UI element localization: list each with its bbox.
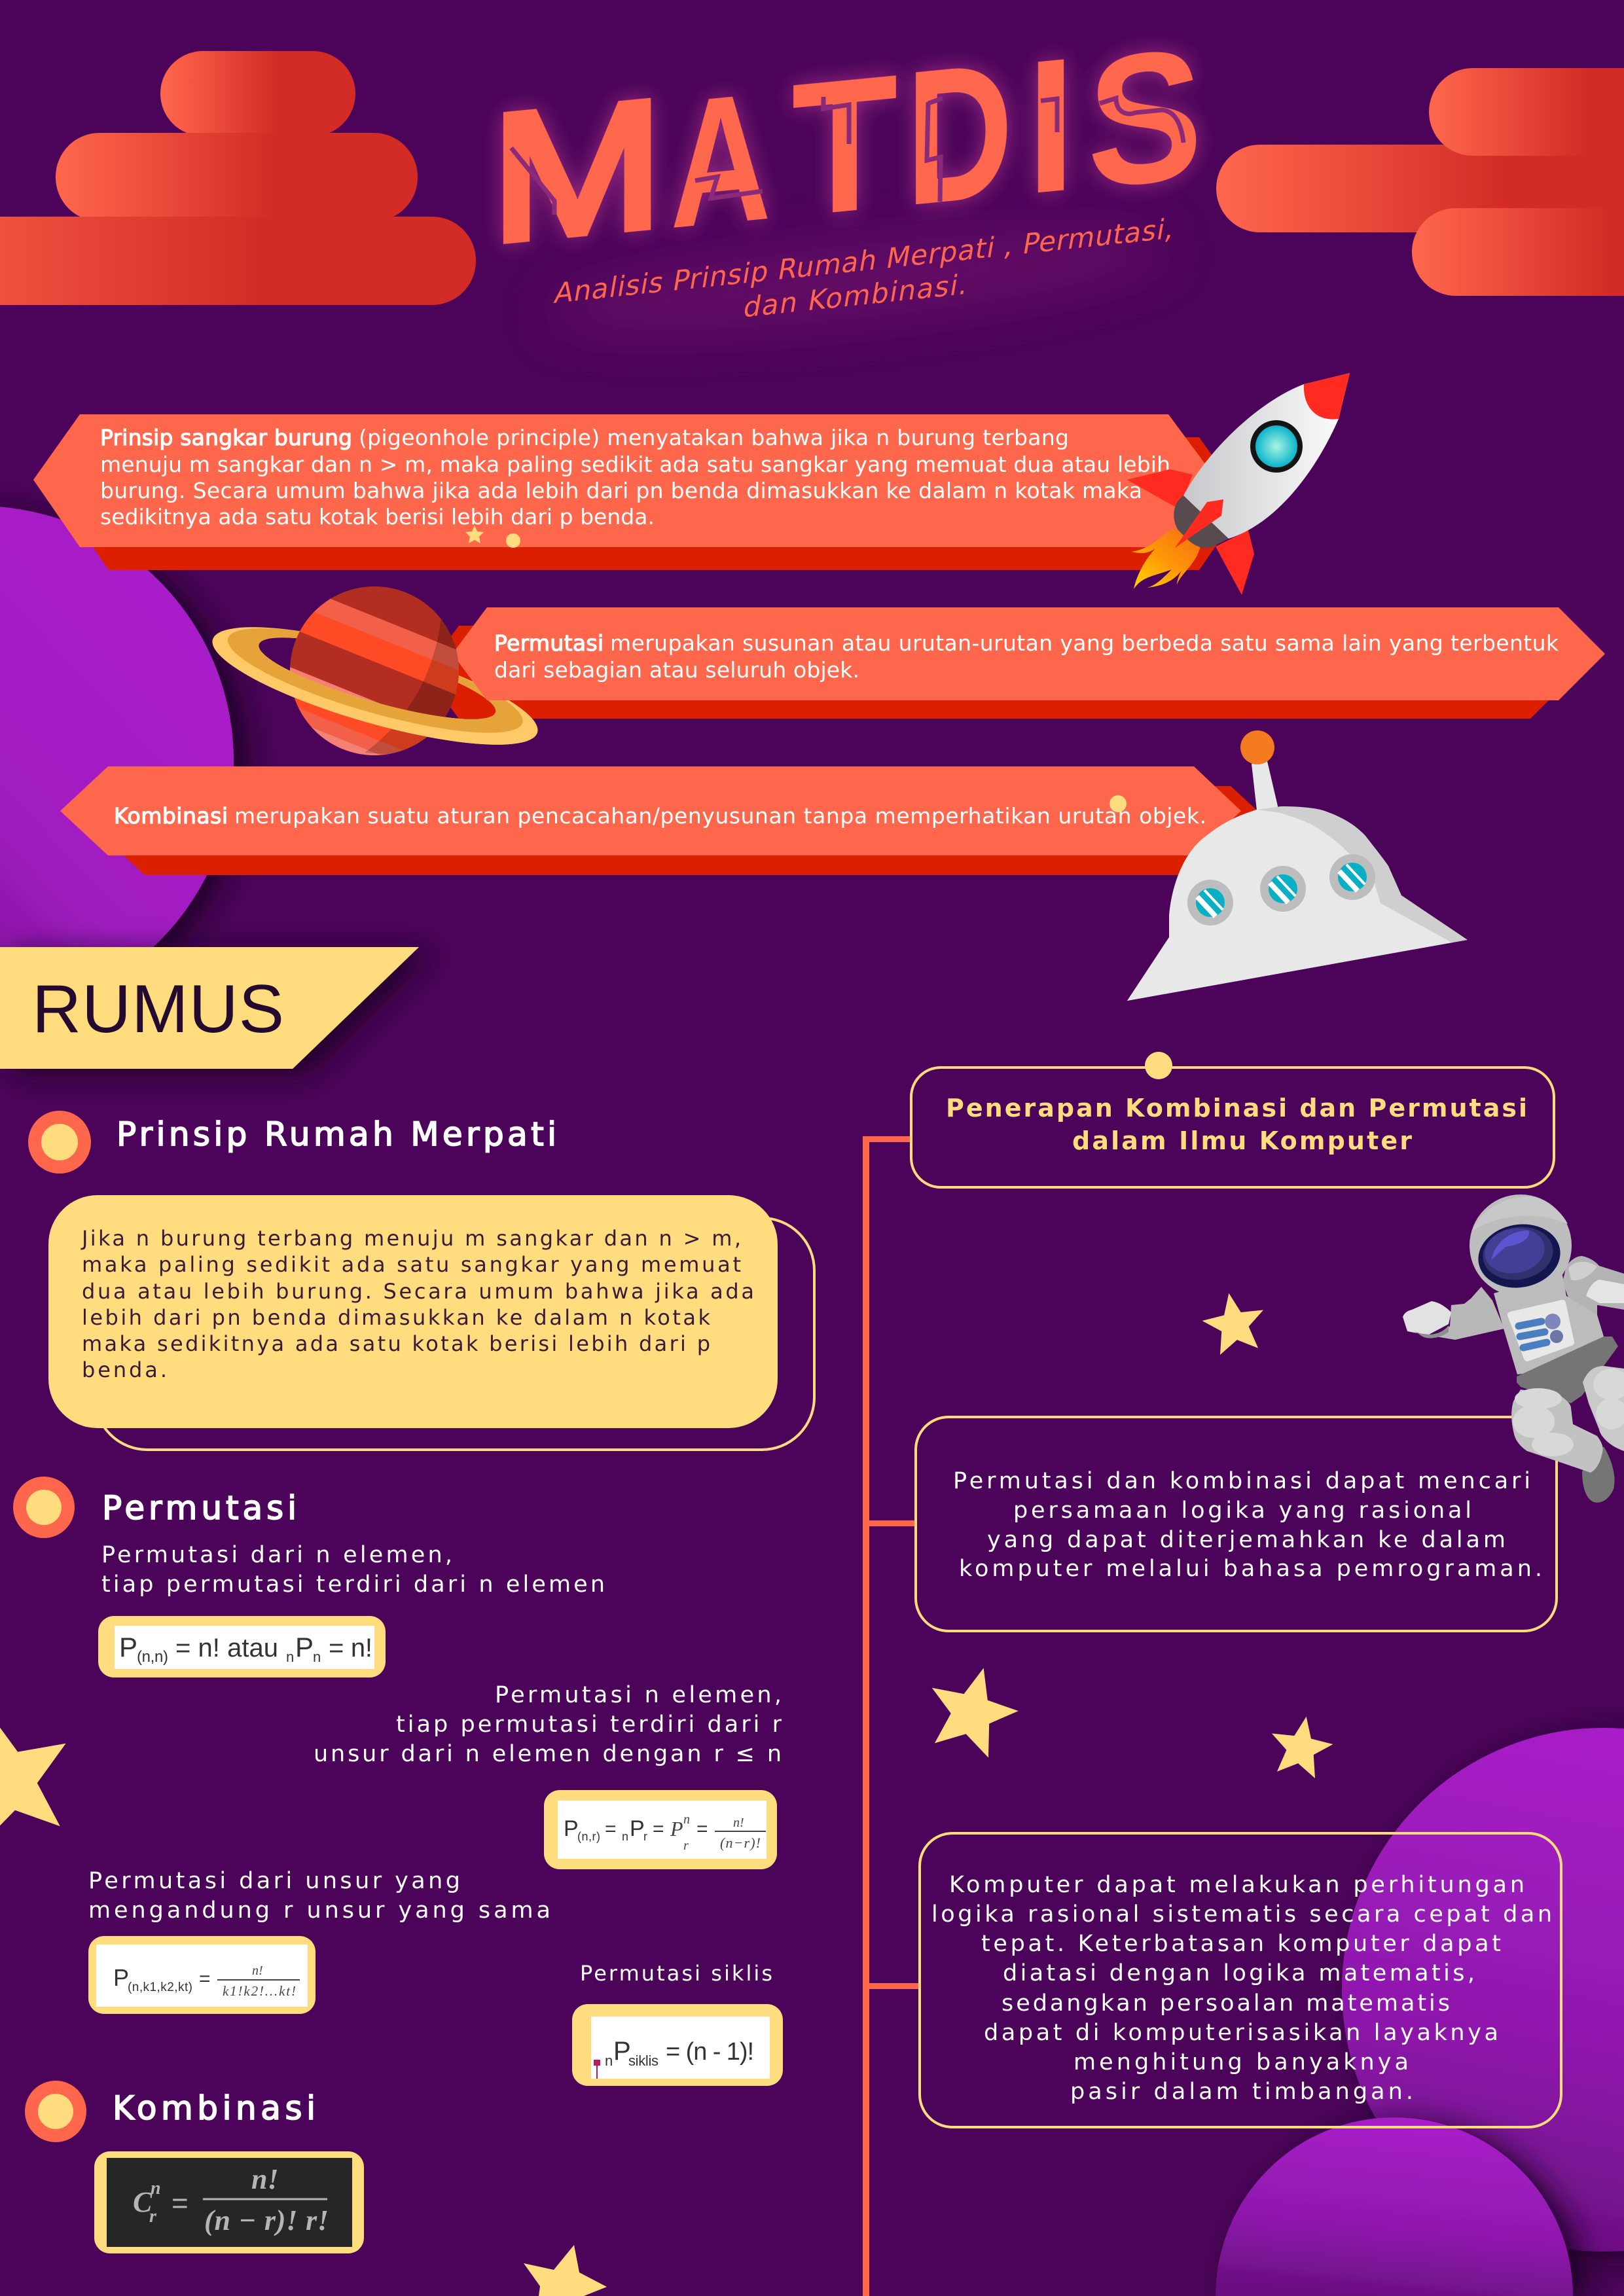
formula: permutasi siklis: P [613, 2037, 631, 2066]
icon: star left edge [0, 1687, 101, 1868]
heading: rumus ribbon: RUMUS [32, 971, 284, 1047]
formula: permutasi unsur sama [88, 1936, 316, 2014]
formula: permutasi n r: (n,r) [577, 1830, 600, 1843]
panel: prinsip rumah merpati text box: maka paling sedikit ada satu sangkar yang memuat [82, 1252, 741, 1277]
panel: kombinasi banner [60, 766, 1279, 875]
saturn ring back [202, 603, 548, 768]
panel: komputer text box: pasir dalam timbangan. [1070, 2079, 1413, 2105]
panel: prinsip rumah merpati text box: Jika n burung terbang menuju m sangkar dan n > m, [81, 1226, 741, 1251]
heading: kombinasi: Kombinasi [113, 2089, 316, 2127]
formula: permutasi n n: = n! atau [175, 1634, 278, 1662]
formula: permutasi n r: r [683, 1839, 689, 1853]
text: permutasi unsur sama: mengandung r unsur yang sama [88, 1897, 550, 1924]
panel: komputer text box: tepat. Keterbatasan komputer dapat [981, 1931, 1501, 1957]
connector lines [863, 1136, 920, 2296]
text: permutasi dari n elemen: tiap permutasi terdiri dari n elemen [101, 1571, 605, 1598]
heading: permutasi: Permutasi [102, 1489, 297, 1527]
formula: permutasi unsur sama: = [199, 1968, 211, 1990]
subtitle: dan Kombinasi. [741, 268, 971, 325]
text: permutasi siklis: Permutasi siklis [580, 1961, 772, 1986]
formula: permutasi n r: n! [733, 1816, 744, 1830]
formula: permutasi n r: = [605, 1818, 617, 1840]
clouds left [0, 51, 476, 305]
formula: permutasi n r: = [653, 1818, 664, 1840]
subtitle glow [541, 213, 1174, 350]
title: I [1026, 25, 1075, 227]
panel: penerapan title box: dalam Ilmu Komputer [1072, 1126, 1412, 1155]
panel: prinsip rumah merpati text box: benda. [82, 1357, 167, 1382]
formula: permutasi n r: = [696, 1818, 708, 1840]
panel: penerapan title box: Penerapan Kombinasi dan Permutasi [946, 1094, 1527, 1122]
panel: prinsip sangkar burung banner: menuju m sangkar dan n > m, maka paling sedikit ada satu sangkar yang memuat dua atau lebih [100, 452, 1170, 477]
panel: prinsip rumah merpati text box [48, 1195, 814, 1450]
panel: komputer text box: Komputer dapat melakukan perhitungan [949, 1872, 1525, 1898]
formula: permutasi n n: n [286, 1649, 294, 1665]
heading: kombinasi [25, 2081, 316, 2142]
title: M [491, 62, 663, 279]
decorative planet: bottom right large circle [1342, 1728, 1624, 2251]
panel: permutasi banner: Permutasi [494, 630, 604, 656]
panel: komputer text box: dapat di komputerisasikan layaknya [984, 2020, 1498, 2046]
icon: star middle right [1265, 1712, 1337, 1780]
panel: prinsip sangkar burung banner: burung. Secara umum bahwa jika ada lebih dari pn benda dimasukkan ke dalam n kotak maka [100, 478, 1142, 503]
panel: prinsip sangkar burung banner: Prinsip sangkar burung [100, 425, 352, 450]
formula: permutasi n r: (n−r)! [720, 1835, 761, 1851]
formula: kombinasi: r [149, 2206, 157, 2227]
panel: komputer text box [920, 1833, 1561, 2127]
icon: star middle [918, 1657, 1027, 1762]
formula: permutasi n n: (n,n) [137, 1648, 168, 1666]
panel: komputer text box: diatasi dengan logika matematis, [1003, 1960, 1475, 1986]
panel: permutasi banner: dari sebagian atau seluruh objek. [494, 657, 859, 683]
panel: prinsip sangkar burung banner [33, 414, 1246, 570]
formula: permutasi n r: P [564, 1816, 579, 1841]
formula: permutasi unsur sama: P [113, 1964, 129, 1991]
panel: permutasi banner [452, 607, 1605, 700]
panel: prinsip sangkar burung banner: (pigeonhole principle) menyatakan bahwa jika n burung terbang [359, 425, 1069, 450]
decorative planet: bottom right small circle [1216, 2117, 1573, 2296]
heading: permutasi [13, 1477, 297, 1538]
formula: kombinasi: (n − r)! r! [204, 2204, 329, 2236]
formula: permutasi unsur sama: k1!k2!...kt! [223, 1983, 296, 1999]
formula: permutasi n r: n [622, 1830, 628, 1843]
formula: permutasi n n: n [313, 1649, 321, 1665]
panel: komputer text box: logika rasional sistematis secara cepat dan [931, 1901, 1552, 1928]
panel: kombinasi banner: merupakan suatu aturan pencacahan/penyusunan tanpa memperhatikan urutan objek. [234, 803, 1206, 829]
heading: prinsip rumah merpati: Prinsip Rumah Merpati [117, 1115, 556, 1153]
formula: permutasi unsur sama: (n,k1,k2,kt) [128, 1981, 192, 1994]
title [491, 9, 1202, 285]
panel: komputer text box: sedangkan persoalan matematis [1001, 1990, 1450, 2017]
panel: permutasi banner: merupakan susunan atau urutan-urutan yang berbeda satu sama lain yang terbentuk [610, 630, 1559, 656]
panel: komputer text box: menghitung banyaknya [1074, 2049, 1409, 2075]
formula: permutasi siklis: = (n - 1)! [666, 2038, 754, 2066]
formula: kombinasi: = [171, 2187, 189, 2219]
text: permutasi n elemen r unsur: tiap permutasi terdiri dari r [396, 1712, 782, 1738]
formula: permutasi n r: r [643, 1830, 647, 1843]
text: permutasi n elemen r unsur [314, 1682, 782, 1767]
title: A [670, 53, 771, 267]
decorative planet: left purple circle [0, 506, 234, 1016]
formula: permutasi n r: P [670, 1817, 683, 1840]
text: permutasi n elemen r unsur: Permutasi n elemen, [495, 1682, 782, 1708]
formula: permutasi n r: P [630, 1816, 645, 1841]
panel: prinsip rumah merpati text box: maka sedikitnya ada satu kotak berisi lebih dari p [82, 1331, 710, 1356]
icon: astronaut [1403, 1194, 1624, 1503]
panel: permutasi dan kombinasi text box: Permutasi dan kombinasi dapat mencari [953, 1468, 1530, 1494]
panel: penerapan title box [911, 1052, 1554, 1187]
formula: permutasi n r [544, 1790, 777, 1869]
title: T [794, 41, 895, 249]
formula: permutasi n r: n [683, 1812, 690, 1827]
title: D [909, 30, 1009, 238]
text: permutasi unsur sama: Permutasi dari unsur yang [88, 1868, 460, 1894]
formula: permutasi siklis: n [605, 2053, 613, 2069]
panel: prinsip rumah merpati text box: dua atau lebih burung. Secara umum bahwa jika ada [82, 1279, 754, 1304]
title: S [1087, 9, 1202, 228]
text: permutasi unsur sama [88, 1868, 550, 1924]
text: permutasi dari n elemen [101, 1542, 605, 1598]
permutasi banner shadow [424, 626, 1577, 719]
icon: saturn planet [212, 586, 537, 755]
panel: prinsip rumah merpati text box: lebih dari pn benda dimasukkan ke dalam n kotak [82, 1305, 710, 1330]
title stencil cuts [511, 97, 1183, 215]
formula: permutasi siklis: siklis [628, 2053, 659, 2069]
icon: star bottom [524, 2245, 607, 2296]
icon: ufo [1127, 730, 1468, 1001]
clouds right [1216, 68, 1624, 296]
panel: permutasi dan kombinasi text box: persamaan logika yang rasional [1013, 1498, 1471, 1524]
formula: kombinasi: C [133, 2186, 153, 2218]
heading: prinsip rumah merpati [28, 1111, 556, 1174]
panel: permutasi dan kombinasi text box: komputer melalui bahasa pemrograman. [959, 1556, 1542, 1582]
formula: kombinasi: n! [251, 2163, 279, 2195]
formula: permutasi unsur sama: n! [252, 1964, 263, 1978]
text: permutasi dari n elemen: Permutasi dari n elemen, [101, 1542, 452, 1568]
formula: kombinasi: n [151, 2178, 161, 2198]
formula: permutasi siklis [572, 2004, 783, 2086]
panel: permutasi dan kombinasi text box: yang dapat diterjemahkan ke dalam [987, 1527, 1506, 1553]
subtitle: Analisis Prinsip Rumah Merpati , Permutasi, [552, 213, 1177, 310]
panel: permutasi dan kombinasi text box [916, 1417, 1557, 1631]
formula: permutasi n n: P [119, 1632, 137, 1662]
formula: permutasi n n: = n! [329, 1634, 372, 1662]
icon: rocket [1127, 373, 1350, 595]
formula: permutasi n n [98, 1616, 386, 1677]
heading: rumus ribbon [0, 947, 419, 1069]
formula: permutasi n n: P [295, 1632, 314, 1662]
text: permutasi n elemen r unsur: unsur dari n elemen dengan r ≤ n [314, 1741, 782, 1767]
icon: star upper right [1199, 1288, 1270, 1357]
formula: kombinasi [94, 2151, 364, 2253]
panel: prinsip sangkar burung banner: sedikitnya ada satu kotak berisi lebih dari p benda. [100, 504, 655, 529]
panel: kombinasi banner: Kombinasi [114, 803, 228, 829]
